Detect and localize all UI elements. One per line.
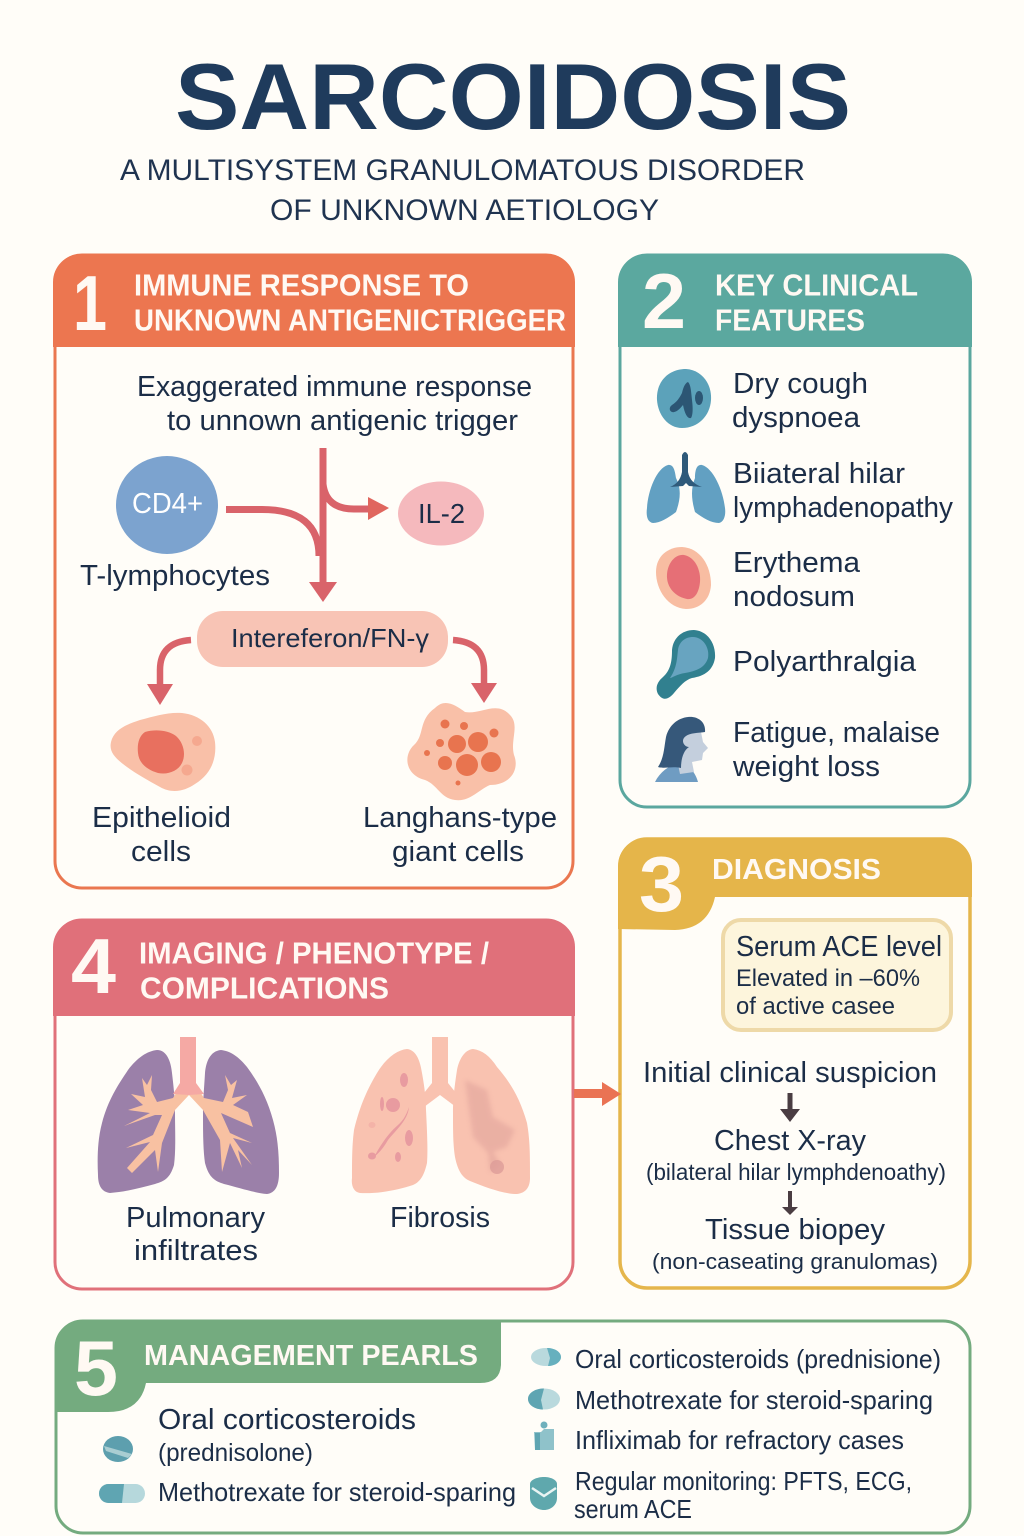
text: dry cough — [732, 368, 868, 434]
diagnostic step: chest x-ray — [646, 1125, 946, 1185]
text: oral corticosteroids: Oral corticosteroids — [158, 1404, 416, 1436]
text: right oral corticosteroids: Oral corticosteroids (prednisione) — [575, 1344, 941, 1374]
panel 3 header: DIAGNOSIS — [712, 854, 881, 886]
icon: person — [655, 717, 708, 782]
panel 2 header — [618, 254, 972, 347]
text: lymphadenopathy: lymphadenopathy — [733, 492, 953, 524]
panel 4: imaging — [53, 919, 575, 1289]
panel 2 header: KEY CLINICAL — [715, 268, 918, 302]
panel 1 header — [53, 254, 575, 347]
interferon pill: Intereferon/FN-γ — [231, 623, 429, 653]
subtitle: A MULTISYSTEM GRANULOMATOUS DISORDER — [120, 154, 805, 187]
IL-2: IL-2 — [418, 498, 465, 529]
arrow: x-ray to biopsy — [782, 1191, 798, 1215]
text: methotrexate: Methotrexate for steroid-sparing — [158, 1477, 516, 1507]
epithelioid cell — [92, 713, 231, 868]
fibrotic patch — [465, 1080, 515, 1173]
CD4+ T-lymphocyte — [80, 456, 270, 592]
icon: joint — [657, 630, 715, 699]
panel 5 header: MANAGEMENT PEARLS — [144, 1340, 478, 1372]
intro text: to unnown antigenic trigger — [167, 405, 518, 437]
pulmonary infiltrates lungs — [98, 1037, 279, 1194]
panel 1 header: IMMUNE RESPONSE TO — [134, 268, 469, 302]
diagnostic step: suspicion: Initial clinical suspicion — [643, 1057, 937, 1089]
text: right methotrexate: Methotrexate for steroid-sparing — [575, 1385, 933, 1415]
callout: serum ACE: of active casee — [736, 993, 895, 1020]
icon: pill right 1 — [531, 1348, 561, 1366]
diagnostic step: biopsy — [652, 1214, 938, 1274]
icon: vial — [534, 1422, 554, 1450]
label: pulmonary infiltrates: infiltrates — [134, 1235, 258, 1267]
text: fatigue: Fatigue, malaise — [733, 717, 940, 749]
panel 3 header — [618, 838, 972, 930]
text: monitoring — [574, 1466, 912, 1524]
intro text: Exaggerated immune response — [137, 371, 532, 403]
diagnostic step: biopsy: Tissue biopey — [705, 1214, 885, 1246]
IL-2 — [398, 482, 484, 546]
text: oral corticosteroids — [158, 1404, 416, 1467]
icon: capsule — [99, 1484, 145, 1503]
Langhans-type giant cell: giant cells — [392, 836, 524, 868]
text: dry cough: dyspnoea — [732, 402, 861, 434]
CD4+ T-lymphocyte: T-lymphocytes — [80, 560, 270, 592]
arrow: suspicion to x-ray — [780, 1093, 800, 1122]
panel 4 header: IMAGING / PHENOTYPE / — [139, 936, 489, 970]
label: fibrosis: Fibrosis — [390, 1202, 490, 1234]
text: monitoring: serum ACE — [574, 1494, 692, 1524]
diagnostic step: chest x-ray: (bilateral hilar lymphdenoathy) — [646, 1159, 946, 1185]
panel 4 header — [53, 919, 575, 1016]
bronchi — [124, 1075, 253, 1173]
panel 2 header: 2 — [642, 257, 686, 345]
arrow: imaging to diagnosis — [574, 1082, 621, 1106]
text: monitoring: Regular monitoring: PFTS, ECG, — [575, 1466, 912, 1496]
panel 2: key clinical features — [618, 254, 972, 807]
icon: pill right 2 — [528, 1388, 560, 1410]
interferon pill — [197, 611, 448, 667]
icon: erythema — [656, 547, 711, 609]
diagnostic step: chest x-ray: Chest X-ray — [714, 1125, 866, 1157]
text: fatigue: weight loss — [732, 751, 880, 783]
text: polyarthralgia: Polyarthralgia — [733, 646, 917, 678]
epithelioid cell: cells — [131, 836, 191, 868]
text: fatigue — [732, 717, 940, 783]
panel 4 header: 4 — [71, 922, 116, 1010]
label: pulmonary infiltrates — [126, 1202, 265, 1267]
panel 1: immune response — [53, 254, 575, 888]
title: SARCOIDOSIS — [175, 44, 851, 149]
diagnostic step: biopsy: (non-caseating granulomas) — [652, 1249, 938, 1274]
epithelioid cell: Epithelioid — [92, 802, 231, 834]
text: infliximab: Infliximab for refractory cases — [575, 1425, 904, 1455]
icon: tablet — [103, 1436, 133, 1462]
panel 3 header: 3 — [639, 840, 684, 928]
fibrosis lungs — [352, 1037, 530, 1194]
subtitle: OF UNKNOWN AETIOLOGY — [270, 194, 659, 227]
intro text — [137, 371, 532, 437]
callout: serum ACE: Serum ACE level — [736, 931, 942, 963]
text: erythema: Erythema — [733, 547, 861, 579]
text: lymphadenopathy — [733, 458, 953, 524]
icon: shield check — [530, 1477, 557, 1510]
panel 2 header: FEATURES — [715, 302, 865, 338]
arrows: pathway to interferon and IL-2 — [226, 448, 389, 602]
panel 4 header: COMPLICATIONS — [140, 970, 389, 1006]
arrows: to cell types — [147, 640, 497, 705]
text: dry cough: Dry cough — [733, 368, 868, 400]
panel 1 header: UNKNOWN ANTIGENICTRIGGER — [134, 302, 566, 338]
callout: serum ACE: Elevated in –60% — [736, 965, 920, 992]
icon: cough — [657, 369, 711, 428]
label: pulmonary infiltrates: Pulmonary — [126, 1202, 265, 1234]
text: erythema — [733, 547, 861, 613]
panel 1 header: 1 — [73, 259, 107, 347]
panel 5 header — [55, 1320, 501, 1412]
icon: lungs — [647, 452, 725, 523]
CD4+ T-lymphocyte: CD4+ — [132, 488, 203, 520]
text: erythema: nodosum — [733, 581, 855, 613]
Langhans-type giant cell: Langhans-type — [363, 802, 557, 834]
Langhans-type giant cell — [363, 703, 557, 868]
text: oral corticosteroids: (prednisolone) — [158, 1439, 313, 1467]
callout: serum ACE — [723, 920, 951, 1030]
panel 5 header: 5 — [74, 1324, 118, 1412]
panel 3: diagnosis — [618, 838, 972, 1288]
subtitle — [120, 154, 805, 227]
panel 5: management pearls — [55, 1320, 970, 1533]
text: lymphadenopathy: Biiateral hilar — [733, 458, 905, 490]
